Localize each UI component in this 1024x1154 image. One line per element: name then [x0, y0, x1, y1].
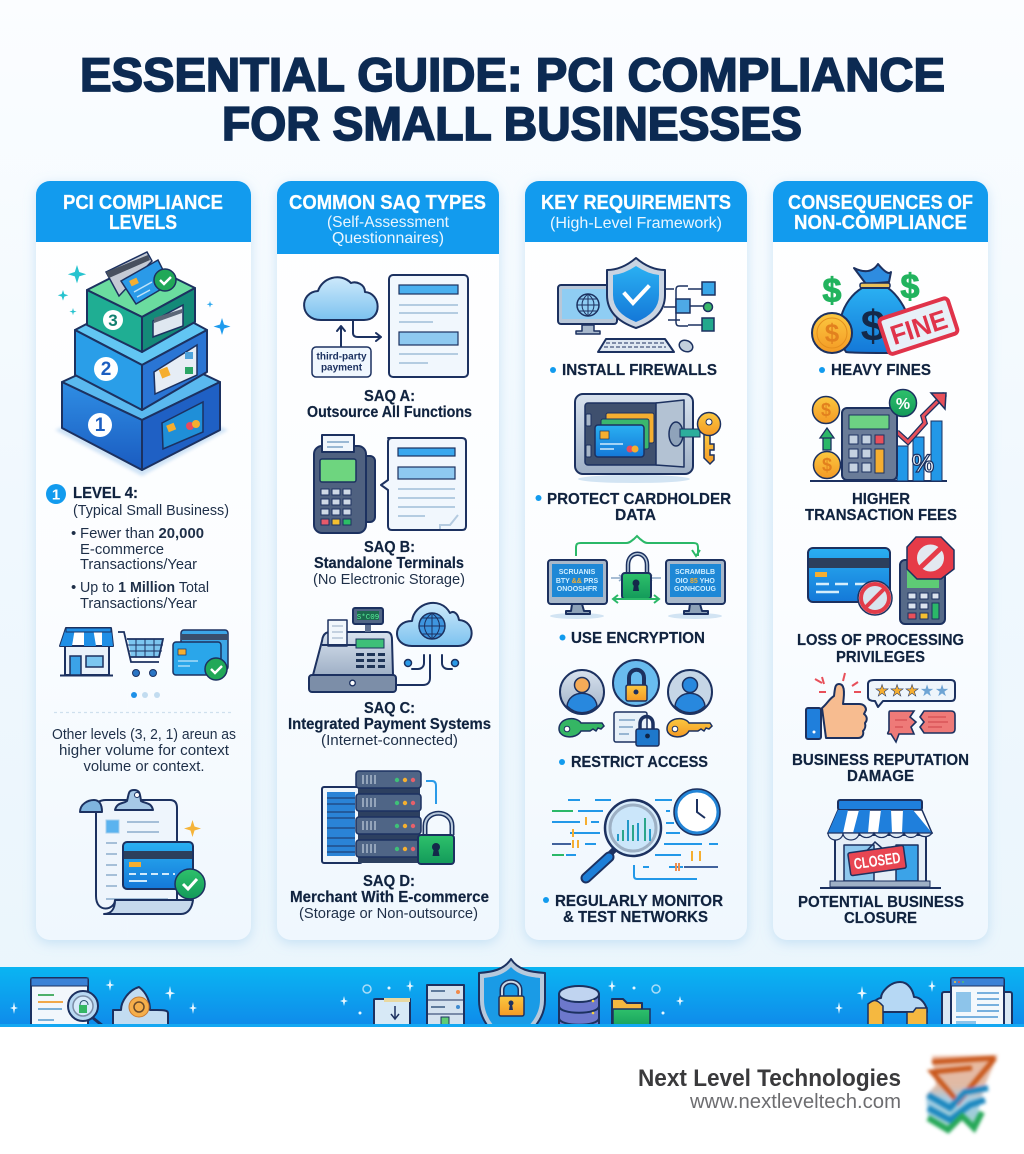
- header: common SAQ types: (Self-Assessment: [327, 214, 450, 231]
- label: higher transaction fees: TRANSACTION FEES: [805, 507, 957, 524]
- panel: common SAQ types: [277, 181, 499, 940]
- header: consequences of non-compliance: NON-COMPLIANCE: [794, 212, 967, 234]
- band icon group: right: [867, 977, 1013, 1024]
- footer company name: www.nextleveltech.com: [689, 1091, 901, 1113]
- SAQ D label: (Storage or Non-outsource): [299, 905, 478, 922]
- icon: stacked level boxes with cards: [55, 252, 230, 476]
- label: regularly monitor and test networks: [543, 893, 723, 926]
- icon: thumbs up and broken review bubbles: ★: [890, 683, 904, 700]
- level 4 description: 1: [52, 486, 60, 504]
- level 4 description: •: [71, 579, 76, 596]
- label: loss of processing privileges: [797, 632, 964, 666]
- icon: money bag and fine stamp: $: [825, 318, 840, 348]
- icon: calculator, fees and rising chart: [810, 390, 947, 481]
- label: business reputation damage: [792, 752, 969, 785]
- SAQ A label: Outsource All Functions: [307, 404, 472, 421]
- level 4 description: LEVEL 4:: [73, 485, 138, 502]
- header: key requirements: KEY REQUIREMENTS: [541, 192, 731, 214]
- icon: SAQ A cloud to document: third-party: [316, 352, 367, 362]
- icon: money bag and fine stamp: $: [901, 268, 920, 306]
- level 4 description: Fewer than 20,000: [80, 525, 204, 542]
- icon: money bag and fine stamp: [812, 264, 958, 355]
- level 4 description: Transactions/Year: [80, 595, 197, 612]
- level numbers: 2: [101, 359, 111, 380]
- panel: PCI compliance levels: [36, 181, 251, 940]
- level 4 description: [46, 484, 229, 612]
- cards on top: [106, 252, 152, 296]
- label: potential business closure: POTENTIAL BUSINESS: [798, 894, 964, 911]
- label: business reputation damage: DAMAGE: [847, 768, 914, 785]
- SAQ B label: [313, 539, 465, 588]
- icon: SAQ B terminal and form: [314, 435, 466, 533]
- SAQ D label: [290, 873, 489, 922]
- SAQ A label: [307, 388, 472, 421]
- label: higher transaction fees: [805, 491, 957, 524]
- icon: SAQ C register and cloud: [309, 603, 472, 692]
- SAQ B label: Standalone Terminals: [314, 555, 464, 572]
- level numbers: 1: [95, 415, 106, 436]
- icon: encryption monitors and lock: GONHCOUG: [674, 586, 717, 593]
- SAQ C label: Integrated Payment Systems: [288, 716, 491, 733]
- label: loss of processing privileges: PRIVILEGES: [836, 649, 925, 666]
- label: potential business closure: [798, 894, 964, 927]
- icon: firewall shield, monitor and network: [558, 258, 715, 354]
- pagination dots: [131, 692, 160, 698]
- label: install firewalls: INSTALL FIREWALLS: [562, 362, 717, 379]
- icon: calculator, fees and rising chart: %: [896, 396, 910, 413]
- header: common SAQ types: [277, 181, 499, 254]
- SAQ B label: SAQ B:: [364, 539, 415, 556]
- footer band with security icons: [0, 958, 1024, 1027]
- level 4 description: Up to 1 Million Total: [80, 579, 209, 596]
- icon: blocked card and terminal: [808, 537, 954, 624]
- label: higher transaction fees: HIGHER: [852, 491, 910, 508]
- header: key requirements: [525, 181, 747, 242]
- SAQ B label: (No Electronic Storage): [313, 571, 465, 588]
- label: heavy fines: HEAVY FINES: [831, 362, 931, 379]
- icon: thumbs up and broken review bubbles: ★: [935, 683, 949, 700]
- icon: calculator, fees and rising chart: %: [912, 450, 934, 478]
- icon: SAQ A cloud to document: payment: [321, 362, 363, 374]
- icon: encryption monitors and lock: BTY && PRS: [556, 578, 598, 585]
- SAQ A label: SAQ A:: [364, 388, 415, 405]
- icon: SAQ D server rack and lock: [322, 771, 454, 864]
- header: consequences of non-compliance: [773, 181, 988, 242]
- icon: magnifier over network logs and clock: [552, 789, 720, 879]
- icon: clipboard receipt with card: [80, 790, 205, 914]
- header: common SAQ types: Questionnaires): [332, 230, 444, 247]
- icon: thumbs up and broken review bubbles: [806, 673, 955, 742]
- other levels note: higher volume for context: [59, 742, 230, 759]
- icon: calculator, fees and rising chart: $: [822, 455, 832, 475]
- icon: thumbs up and broken review bubbles: ★: [920, 683, 934, 700]
- SAQ C label: SAQ C:: [364, 700, 415, 717]
- icon: encryption monitors and lock: OIO 85 YHO: [675, 578, 715, 585]
- header: consequences of non-compliance: CONSEQUENCES OF: [788, 192, 973, 214]
- icon: SAQ C register and cloud: S*C09: [357, 614, 379, 622]
- icon: money bag and fine stamp: FINE: [887, 304, 951, 351]
- band icon group: center: [373, 958, 651, 1024]
- icon: money bag and fine stamp: $: [823, 272, 842, 310]
- header: key requirements: (High-Level Framework): [550, 215, 722, 232]
- label: protect cardholder data: DATA: [615, 507, 656, 524]
- sparkles: [58, 265, 230, 335]
- icon: closed store: CLOSED: [853, 850, 902, 873]
- icon: store, cart and card: [60, 628, 228, 680]
- label: business reputation damage: BUSINESS REPUTATION: [792, 752, 969, 769]
- band sparkles: [10, 979, 936, 1014]
- header: common SAQ types: COMMON SAQ TYPES: [289, 192, 486, 214]
- label: protect cardholder data: PROTECT CARDHOLDER: [547, 491, 731, 508]
- level 4 description: •: [71, 525, 76, 542]
- SAQ C label: [288, 700, 491, 749]
- SAQ D label: Merchant With E-commerce: [290, 889, 489, 906]
- icon: encryption monitors and lock: ONOOSHFR: [557, 586, 597, 593]
- other levels note: [52, 726, 236, 775]
- label: regularly monitor and test networks: REGULARLY MONITOR: [555, 893, 723, 910]
- title: ESSENTIAL GUIDE: PCI COMPLIANCE: [80, 48, 945, 101]
- header: PCI compliance levels: LEVELS: [109, 212, 177, 234]
- icon: encryption monitors and lock: SCRAMBLB: [675, 569, 715, 576]
- icon: SAQ A cloud to document: [304, 275, 468, 377]
- label: loss of processing privileges: LOSS OF PROCESSING: [797, 632, 964, 649]
- icon: closed store: [820, 800, 941, 888]
- other levels note: volume or context.: [84, 758, 204, 775]
- panel: key requirements: [525, 181, 747, 940]
- label: protect cardholder data: [536, 491, 731, 524]
- title: [80, 48, 945, 150]
- icon: encryption monitors and lock: SCRUANIS: [559, 569, 596, 576]
- header: PCI compliance levels: PCI COMPLIANCE: [63, 192, 223, 214]
- other levels note: Other levels (3, 2, 1) areun as: [52, 726, 236, 743]
- icon: thumbs up and broken review bubbles: ★: [875, 683, 889, 700]
- label: restrict access: RESTRICT ACCESS: [571, 754, 708, 771]
- logo: [926, 1055, 998, 1130]
- icon: thumbs up and broken review bubbles: ★: [905, 683, 919, 700]
- level 4 description: Transactions/Year: [80, 556, 197, 573]
- icon: money bag and fine stamp: $: [861, 302, 885, 351]
- band icon group: left: [30, 977, 169, 1024]
- level 4 description: E-commerce: [80, 541, 164, 558]
- SAQ D label: SAQ D:: [363, 873, 415, 890]
- title: FOR SMALL BUSINESSES: [222, 97, 802, 150]
- level numbers: [88, 310, 123, 437]
- label: regularly monitor and test networks: & TEST NETWORKS: [563, 909, 708, 926]
- label: use encryption: USE ENCRYPTION: [571, 630, 705, 647]
- level numbers: 3: [108, 311, 118, 330]
- header: PCI compliance levels: [36, 181, 251, 242]
- icon: encryption monitors and lock: [548, 536, 725, 619]
- footer company name: Next Level Technologies: [638, 1065, 901, 1092]
- panel: consequences of non-compliance: [773, 181, 988, 940]
- icon: calculator, fees and rising chart: $: [821, 400, 831, 420]
- icon: safe with cards and key: [575, 394, 720, 483]
- SAQ C label: (Internet-connected): [321, 732, 458, 749]
- icon: restricted access users and keys: [559, 660, 712, 746]
- level 4 description: (Typical Small Business): [73, 502, 229, 519]
- footer company name: [638, 1065, 901, 1113]
- label: potential business closure: CLOSURE: [844, 910, 917, 927]
